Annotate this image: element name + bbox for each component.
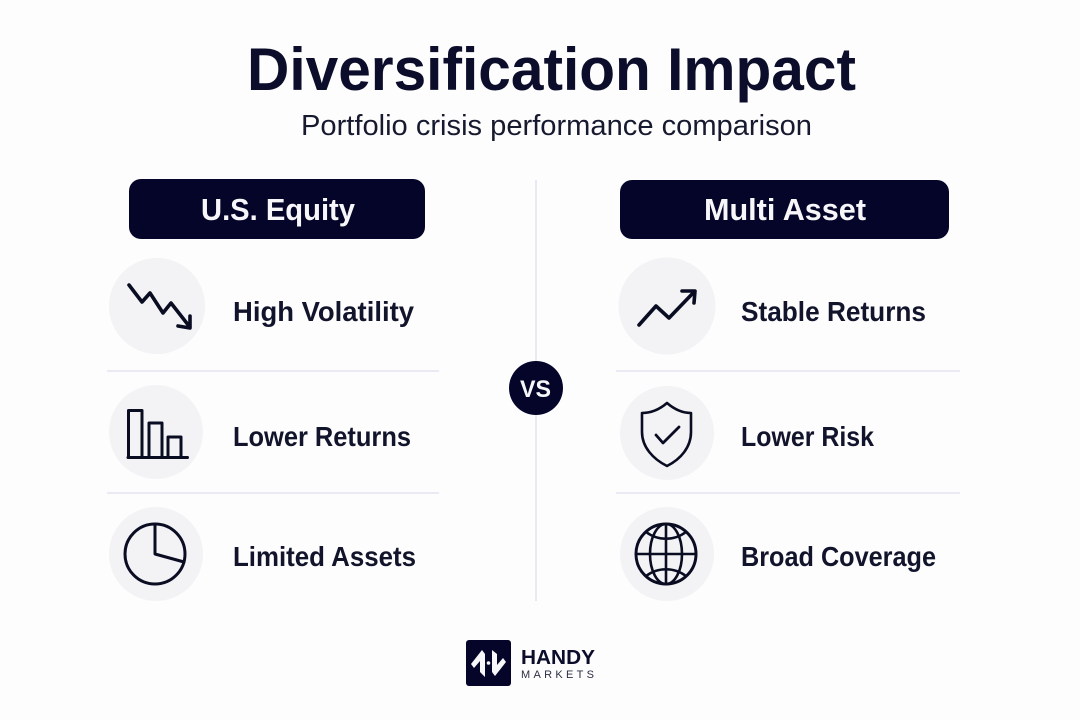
row: Lower Risk: Lower Risk [741, 421, 874, 452]
heading: U.S. Equity [129, 179, 425, 239]
row: High Volatility [109, 258, 414, 354]
row: Lower Returns [109, 385, 411, 479]
heading: Multi Asset: Multi Asset [704, 192, 866, 227]
row: Lower Returns: Lower Returns [233, 421, 411, 452]
panel: Multi Asset [616, 180, 960, 601]
VS badge [509, 361, 563, 415]
row: High Volatility: High Volatility [233, 296, 414, 327]
heading: Multi Asset [620, 180, 949, 239]
row: Limited Assets [109, 507, 416, 601]
title: Diversification Impact [247, 36, 856, 103]
heading: U.S. Equity: U.S. Equity [201, 192, 356, 227]
row: Broad Coverage [620, 507, 936, 601]
VS badge: VS [520, 376, 551, 403]
row: Stable Returns: Stable Returns [741, 296, 926, 327]
logo: Handy Markets [466, 640, 596, 686]
row: Stable Returns [618, 258, 926, 354]
row: Lower Risk [620, 386, 874, 480]
logo: Handy Markets: MARKETS [521, 669, 594, 681]
icon: logo mark [466, 640, 511, 686]
panel: U.S. Equity [107, 179, 439, 601]
row: Broad Coverage: Broad Coverage [741, 541, 936, 572]
logo: Handy Markets: HANDY [521, 647, 596, 669]
subtitle: Portfolio crisis performance comparison [301, 110, 812, 142]
row: Limited Assets: Limited Assets [233, 541, 416, 572]
